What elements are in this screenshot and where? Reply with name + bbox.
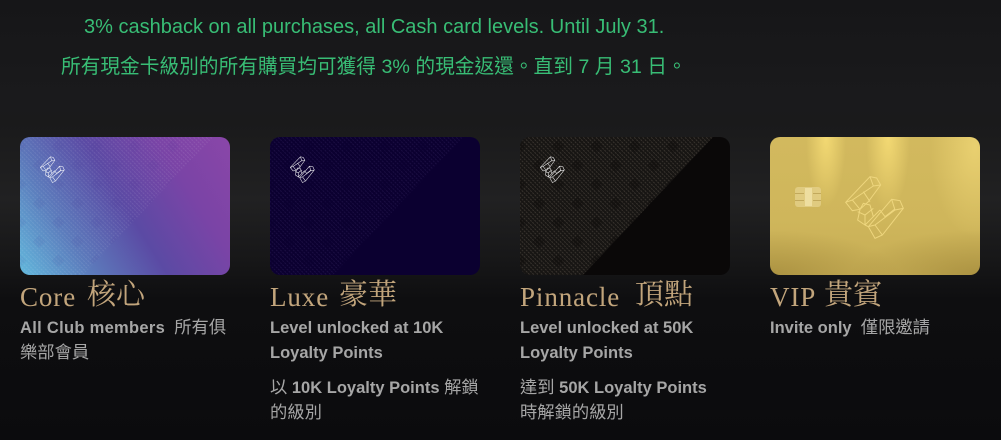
card title: Core: Core xyxy=(20,282,76,312)
text: 貴賓 xyxy=(824,279,882,311)
card: Core xyxy=(20,137,230,275)
description: Core: All Club members 所有俱 xyxy=(20,317,226,337)
card title: Core xyxy=(20,279,145,312)
description: Pinnacle: Loyalty Points xyxy=(520,344,633,362)
icon: logo xyxy=(40,156,65,183)
card title: Pinnacle xyxy=(520,279,693,312)
description: Luxe: Level unlocked at 10K xyxy=(270,319,443,337)
icon: logo xyxy=(540,156,565,183)
card title: Luxe: Luxe xyxy=(270,282,329,312)
card title: Luxe xyxy=(270,279,397,312)
description: VIP: Invite only 僅限邀請 xyxy=(770,317,930,337)
description: Pinnacle: 達到 50K Loyalty Points xyxy=(520,377,707,397)
card: Pinnacle xyxy=(520,137,730,275)
description: Pinnacle xyxy=(520,319,707,422)
description: Pinnacle: Level unlocked at 50K xyxy=(520,319,693,337)
text: 豪華 xyxy=(339,279,397,311)
description: Luxe: 的級別 xyxy=(270,402,322,422)
card: VIP xyxy=(770,137,980,275)
icon: logo xyxy=(845,176,904,239)
text: 頂點 xyxy=(635,279,693,311)
card title: Pinnacle: Pinnacle xyxy=(520,282,620,312)
icon: chip xyxy=(795,187,821,207)
card title: VIP xyxy=(770,279,882,312)
promo text: Chinese: 所有現金卡級別的所有購買均可獲得 3% 的現金返還。直到 7 月 31 日。 xyxy=(61,56,687,78)
description: Pinnacle: 時解鎖的級別 xyxy=(520,402,624,422)
promo text: English: 3% cashback on all purchases, all Cash card levels. Until July 31. xyxy=(84,16,664,38)
icon: logo xyxy=(290,156,315,183)
card: Luxe xyxy=(270,137,480,275)
description: Luxe xyxy=(270,319,479,422)
description: Luxe: Loyalty Points xyxy=(270,344,383,362)
description: Core xyxy=(20,317,226,362)
text: 核心 xyxy=(87,279,145,311)
card title: VIP: VIP xyxy=(770,282,816,312)
description: Luxe: 以 10K Loyalty Points 解鎖 xyxy=(270,377,479,397)
description: Core: 樂部會員 xyxy=(20,342,89,362)
